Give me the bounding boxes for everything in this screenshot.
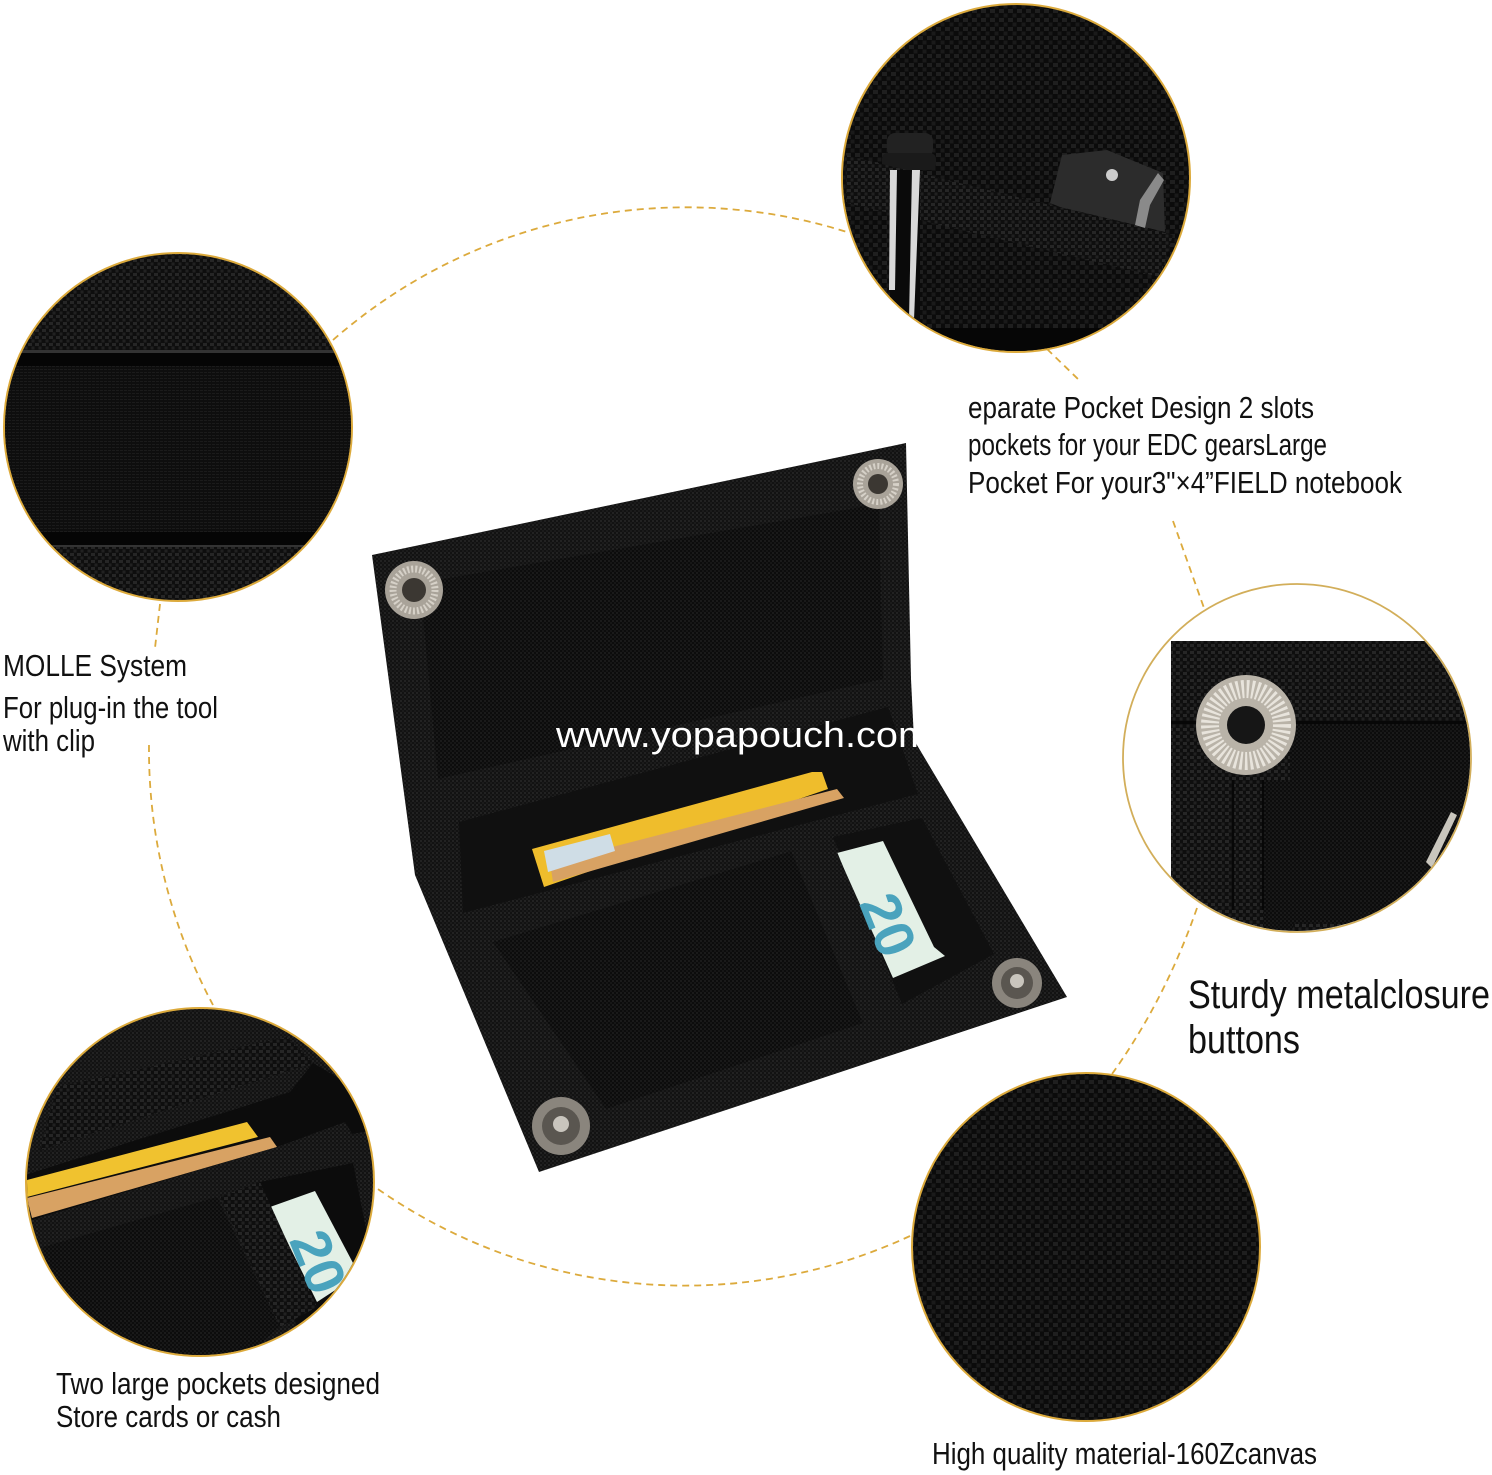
caption: MOLLE system: For plug-in the tool [3,690,218,725]
caption: pocket design: Pocket For your3"×4”FIELD notebook [968,465,1402,500]
caption: two pockets [56,1366,380,1434]
caption: two pockets: Two large pockets designed [56,1366,380,1401]
photo: open wallet [372,443,1067,1172]
detail circle: canvas [912,1073,1260,1421]
caption: MOLLE system: MOLLE System [3,648,187,683]
caption: pocket design [968,390,1402,500]
detail circle: card pockets: 20 [278,1221,359,1302]
credit cards [532,772,844,887]
flap inner canvas [420,504,883,779]
detail circle: snap button [1123,584,1471,941]
snap button bottom left [532,1097,590,1155]
pocket strap [789,837,902,1023]
banknote [837,841,945,978]
caption: MOLLE system [2,648,218,758]
dashed connector ring [149,207,1204,1286]
detail circle: webbing [0,253,360,601]
caption: closure buttons: buttons [1188,1018,1300,1062]
detail circle: pocket [842,4,1190,360]
snap button top right [853,459,903,509]
lower pocket strap [463,794,929,937]
inner dark gap [459,707,918,913]
caption: material: High quality material-160Zcanvas [932,1436,1317,1471]
wallet silhouette [372,443,1067,1172]
banknote: 20 [848,884,929,965]
caption: pocket design: eparate Pocket Design 2 slots [968,390,1314,425]
caption: MOLLE system: with clip [2,723,95,758]
watermark url: www.yopapouch.com [555,714,931,755]
detail circle: card pockets [25,1008,380,1360]
caption: closure buttons [1188,973,1490,1062]
lower pocket canvas [493,851,863,1109]
snap button bottom right [992,958,1042,1008]
caption: pocket design: pockets for your EDC gearsLarge [968,427,1327,462]
right pocket canvas [833,818,994,1004]
snap button top left [385,561,443,619]
caption: two pockets: Store cards or cash [56,1399,281,1434]
